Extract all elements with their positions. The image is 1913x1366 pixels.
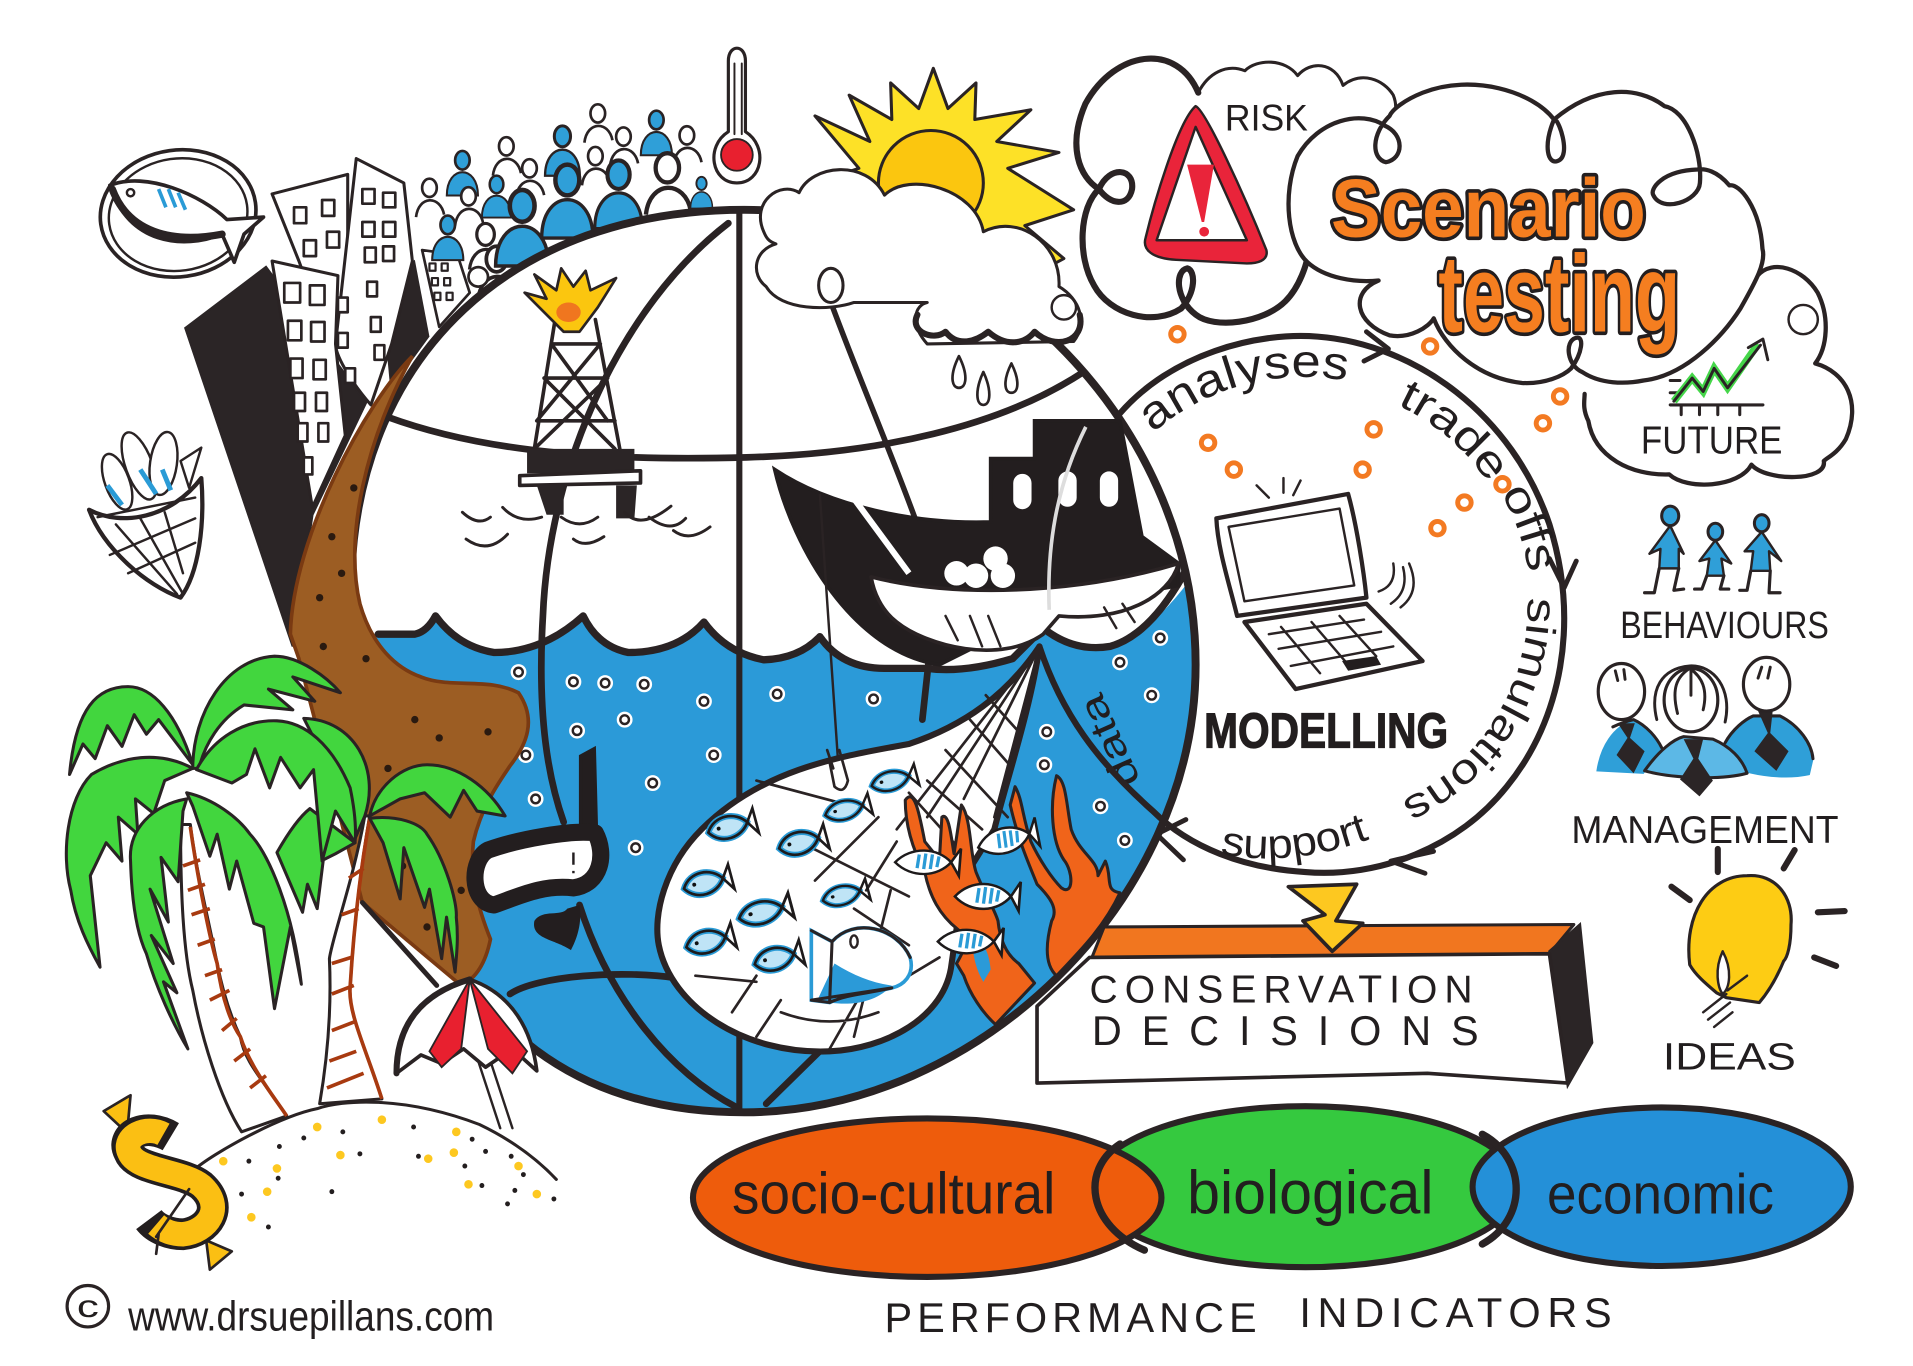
coral	[895, 776, 1120, 1024]
snorkel mask	[475, 749, 601, 950]
black tower rear	[381, 260, 429, 390]
copyright: www.drsuepillans.com	[127, 1293, 494, 1340]
icon: fish on plate	[92, 140, 264, 287]
economic ellipse	[1473, 1107, 1851, 1266]
second palm lower frond	[370, 818, 457, 972]
centre-left frond	[130, 799, 188, 1049]
heading: testing: testing	[1438, 234, 1680, 356]
rain drops	[953, 356, 1017, 405]
front white tower	[272, 261, 345, 507]
copyright: c	[77, 1288, 99, 1324]
crowd of people	[416, 104, 712, 300]
mast stripe	[844, 485, 909, 573]
trunk right	[320, 816, 382, 1104]
big arc frond	[196, 721, 355, 861]
lower right frond	[277, 809, 355, 912]
modelling circle: trade	[1402, 382, 1502, 478]
future cloud	[1584, 267, 1852, 485]
globe	[348, 210, 1220, 1146]
right coral branch	[1010, 776, 1120, 976]
crew	[956, 559, 1003, 576]
top centre frond	[193, 656, 340, 768]
small fish	[705, 808, 759, 846]
globe outline	[351, 210, 1196, 1112]
copyright	[67, 1286, 494, 1340]
bubbles	[519, 638, 1160, 848]
future label: FUTURE	[1641, 420, 1782, 463]
beach umbrella	[397, 979, 537, 1128]
ship hull and superstructure	[775, 421, 1179, 665]
modelling heading: MODELLING	[1204, 705, 1448, 759]
risk cloud	[1076, 59, 1396, 323]
ellipse labels: socio-cultural	[732, 1162, 1055, 1227]
icon: fish in net bag	[89, 428, 202, 598]
top left frond	[70, 687, 193, 774]
ocean water	[376, 586, 1192, 1108]
dinghy	[871, 563, 1179, 650]
hook	[827, 750, 848, 790]
ideas label: IDEAS	[1663, 1037, 1796, 1079]
buildings	[185, 159, 470, 646]
centre-right frond	[187, 793, 301, 1009]
second palm top frond	[370, 765, 505, 817]
performance indicators	[693, 1106, 1851, 1341]
portholes	[1022, 481, 1109, 500]
people: management	[1571, 657, 1839, 852]
cloud over globe	[756, 170, 1081, 344]
risk label: RISK	[1225, 98, 1308, 139]
back right white tower	[336, 159, 412, 405]
fishing ship	[775, 421, 1179, 797]
fishing line	[820, 494, 843, 797]
orange rings	[1177, 334, 1560, 528]
black tower	[185, 267, 366, 646]
icon: lightning arrow	[1288, 884, 1363, 951]
growth chart	[1670, 339, 1768, 415]
striped fish on coral	[974, 817, 1042, 862]
box text: CONSERVATION	[1089, 969, 1473, 1012]
icon: thermometer	[714, 48, 760, 183]
behaviours label: BEHAVIOURS	[1620, 605, 1829, 647]
conservation decisions box	[1037, 884, 1592, 1085]
icon: warning triangle	[1145, 106, 1267, 263]
small white tower	[422, 250, 470, 327]
meridians and latitudes	[737, 210, 742, 1112]
icon: laptop	[1216, 478, 1423, 689]
back frond	[304, 718, 369, 842]
data label: data	[1070, 687, 1149, 794]
land	[290, 356, 528, 985]
biological ellipse	[1092, 1106, 1519, 1267]
back left white tower	[272, 174, 348, 317]
modelling circle: simulations	[1404, 599, 1556, 818]
performance indicators: economic	[1547, 1163, 1774, 1226]
wave line	[378, 563, 1190, 670]
left coral branch	[905, 797, 1035, 1024]
caption: PERFORMANCE	[885, 1294, 1257, 1341]
heading: Scenario: Scenario	[1331, 162, 1646, 255]
sandy island	[193, 1102, 556, 1227]
management label: MANAGEMENT	[1571, 809, 1839, 852]
modelling circle	[1036, 325, 1579, 876]
fishing net with catch	[657, 646, 1039, 1052]
icon: idea light bulb	[1663, 849, 1845, 1079]
scenario testing cloud	[1289, 85, 1763, 383]
people: behaviours	[1620, 506, 1829, 647]
trunk left	[181, 824, 287, 1132]
modelling circle: offs	[1505, 488, 1553, 570]
icon: dollar sign	[104, 1095, 232, 1270]
icon: sun	[815, 68, 1074, 293]
arrowheads	[1157, 332, 1576, 873]
conservation decisions box: DECISIONS	[1092, 1007, 1479, 1054]
overlap outlines	[1095, 1134, 1516, 1250]
icon: oil rig	[462, 268, 710, 546]
socio-cultural ellipse	[693, 1118, 1161, 1277]
left frond	[66, 757, 193, 967]
palm trees	[66, 656, 505, 1132]
net mesh	[695, 646, 1039, 1049]
process words: analyses	[1144, 352, 1347, 429]
modelling circle: support	[1222, 816, 1370, 867]
big fish	[811, 928, 911, 1003]
performance indicators: biological	[1187, 1159, 1434, 1227]
performance indicators: INDICATORS	[1299, 1289, 1612, 1336]
